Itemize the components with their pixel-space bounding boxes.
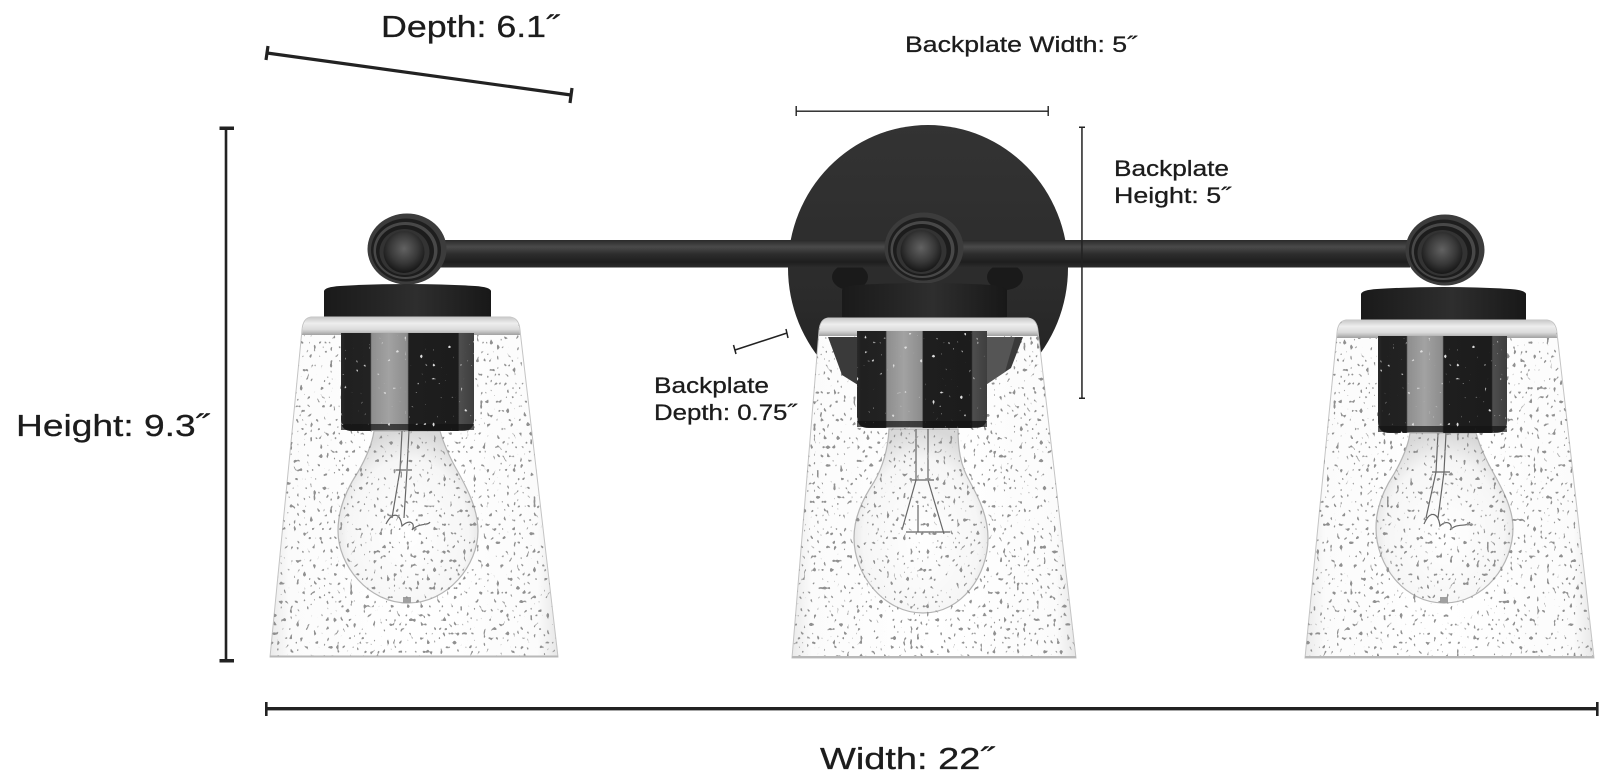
knob: center [884,212,964,284]
label: backplate depth [654,373,798,425]
seeded glass bubbles: center [785,334,1080,660]
bulb: left [338,431,478,603]
label: backplate depth: Backplate [654,373,769,398]
backplate [788,125,1068,411]
glass shade: center [792,318,1076,658]
socket: right [1378,336,1507,433]
dimension: backplate height line [1079,126,1085,399]
dimension: backplate depth line [734,329,788,354]
label: backplate height: Backplate [1114,156,1229,181]
dimension: height line [220,126,234,662]
dimension: width line [265,702,1599,716]
cap: right [1361,287,1526,324]
knob: left [368,214,446,284]
shade rim: center [819,318,1038,336]
socket: center [857,331,987,428]
cap: left [324,284,491,322]
label: backplate height [1114,156,1232,208]
label: height: Height: 9.3˝ [16,408,210,443]
socket: left [341,333,474,431]
shade rim: left [302,317,520,335]
dimension: depth line [266,46,572,103]
label: width: Width: 22˝ [820,741,995,776]
lamp: left [260,214,570,659]
seeded glass bubbles: left [260,333,570,659]
label: backplate depth: Depth: 0.75˝ [654,400,798,425]
bulb: center [854,429,988,613]
bulb: right [1376,433,1513,603]
backplate seen through glass [828,337,1023,385]
glass shade: right [1305,320,1594,658]
horizontal arm [440,240,1410,268]
knob: right [1406,214,1484,286]
lamp: center [785,212,1080,660]
label: backplate height: Height: 5˝ [1114,183,1232,208]
lamp: right [1300,214,1600,660]
cap: center [842,283,1007,320]
shade rim: right [1337,320,1557,338]
label: depth: Depth: 6.1˝ [381,9,560,44]
socket bubbles [341,333,1507,433]
dimension: backplate width line [796,106,1049,116]
seeded glass bubbles: right [1300,336,1600,660]
glass shade: left [270,317,558,657]
label: backplate width: Backplate Width: 5˝ [905,32,1138,57]
